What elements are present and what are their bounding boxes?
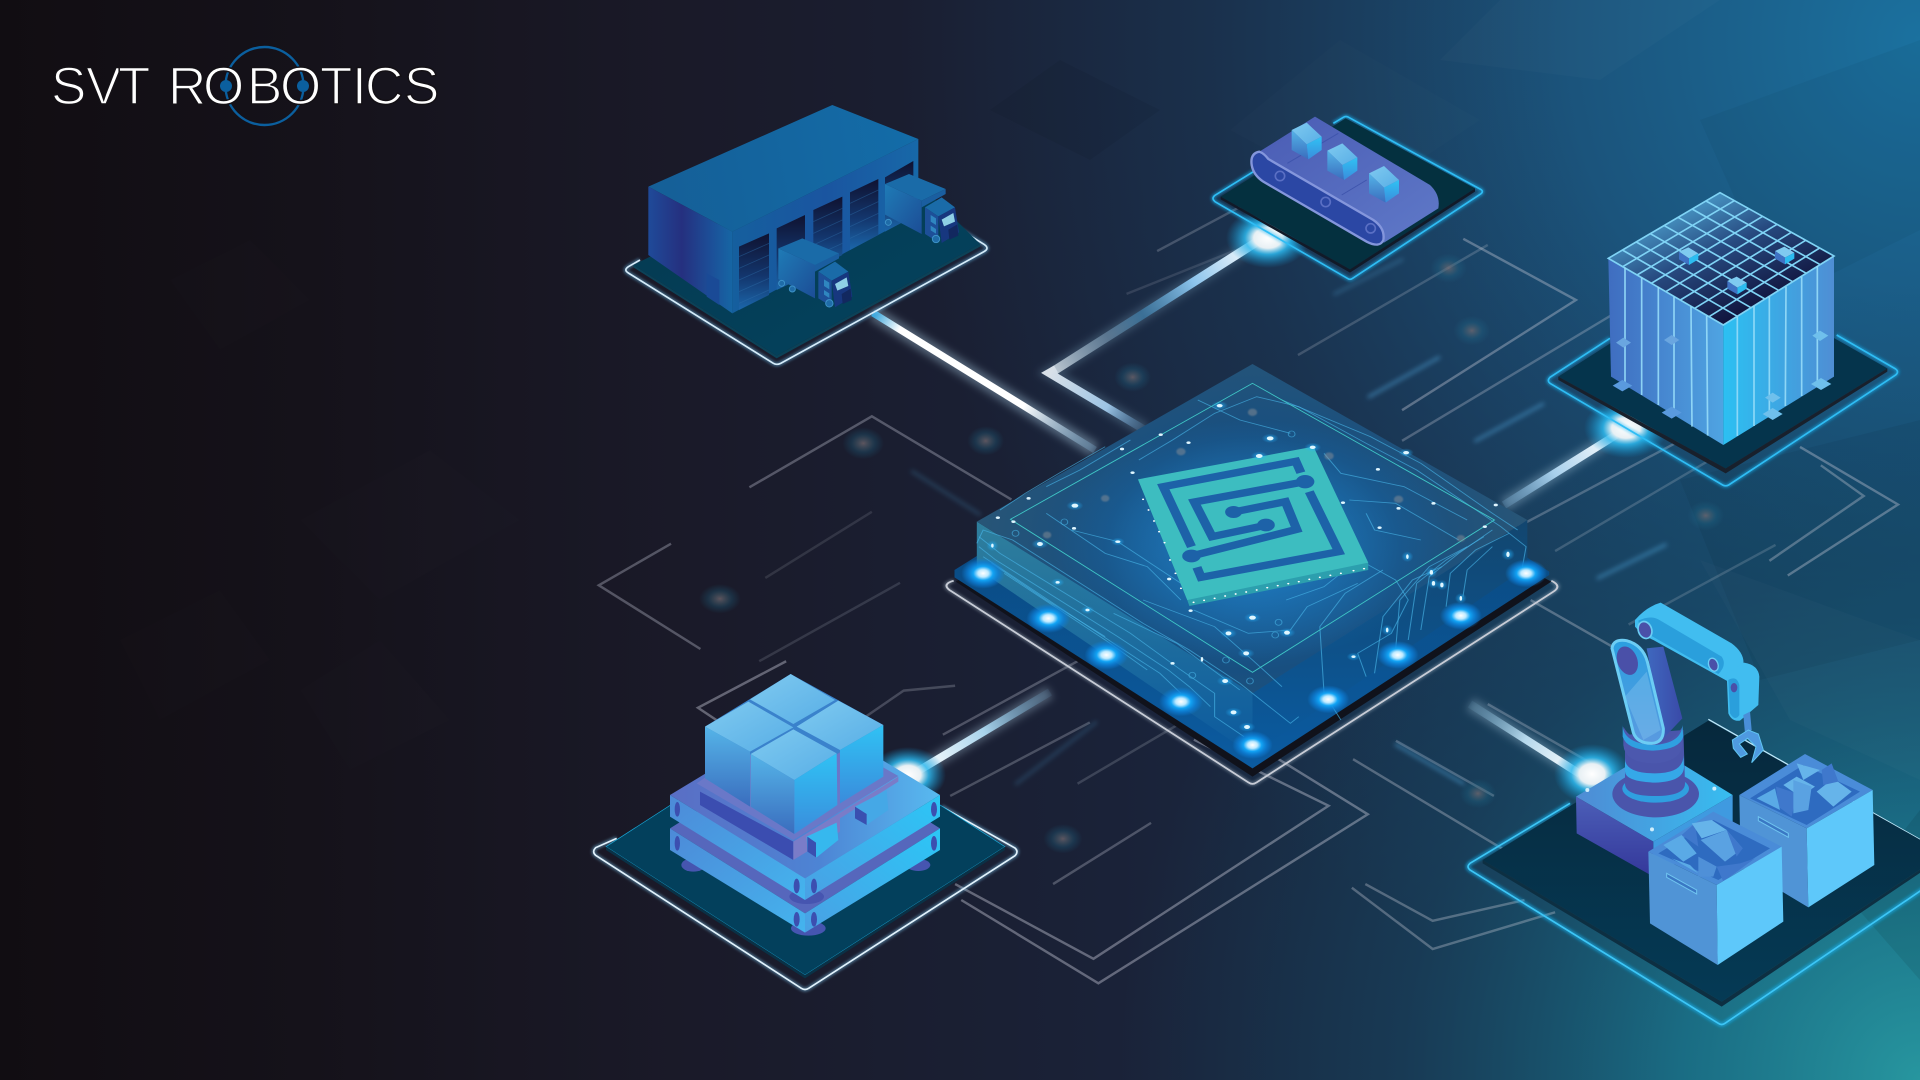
pallet feet: [681, 823, 930, 936]
grey chip spots: [1043, 409, 1465, 542]
connector beam: storage to chip: [1504, 398, 1668, 505]
chip edge lamps: [961, 558, 1547, 759]
robot wrist: [1727, 663, 1759, 733]
front bin contents: [1663, 820, 1755, 882]
box: left: [705, 702, 793, 807]
box: right: [797, 701, 883, 803]
blurred light streaks: [912, 260, 1665, 784]
background circuit lines: [599, 202, 1898, 983]
maze pattern: [1163, 461, 1339, 577]
robot platform slab: [1483, 721, 1920, 1002]
conveyor box 2: [1327, 143, 1357, 180]
panel: conveyor platform: [1213, 116, 1482, 279]
box: front: [751, 729, 837, 834]
box stack backing: [705, 674, 883, 782]
conveyor box 1: [1292, 123, 1322, 159]
warehouse building: [648, 105, 918, 313]
chip outline: [946, 581, 1557, 784]
robot upper arm: [1635, 603, 1744, 682]
logo wordmark: SVT ROBOTICS: [51, 57, 439, 116]
chip glowing dots: [991, 404, 1510, 729]
platform outline: [626, 223, 987, 364]
chip top face: [977, 364, 1527, 693]
truck: front: [778, 238, 852, 307]
robot base: [1576, 748, 1733, 877]
storage platform outline: [1548, 335, 1897, 486]
logo: SVT Robotics: [51, 47, 439, 125]
chip shadow: [956, 423, 1551, 777]
pallet platform slab: [606, 718, 1005, 975]
robot platform outline: [1468, 719, 1920, 1024]
robot gripper: [1732, 730, 1763, 763]
storage robots on grid: [1679, 247, 1794, 294]
chip inner outline: [1010, 383, 1495, 672]
glowing network nodes: [699, 253, 1724, 853]
conveyor platform outline: [1213, 116, 1482, 279]
robot lower arm: [1612, 640, 1682, 743]
panel: robot platform: [1468, 603, 1920, 1024]
teal logo chip: [1138, 447, 1368, 606]
robot arm column: [1612, 725, 1699, 817]
pallet platform outline: [594, 807, 1017, 989]
panel: central chip: [946, 364, 1557, 784]
logo dots: [220, 80, 309, 92]
wooden pallet: [697, 717, 898, 860]
circuit traces: [977, 397, 1526, 737]
storage cube: [1608, 193, 1834, 445]
connector beam: warehouse to chip: [873, 313, 1095, 450]
panel: warehouse platform: [626, 105, 987, 364]
connector beam: conveyor to chip: [1049, 208, 1310, 430]
conveyor rollers: [1275, 171, 1375, 233]
loading dock doors: [739, 161, 913, 310]
lower pallet tier: [670, 743, 940, 933]
bin: rear: [1739, 754, 1874, 907]
chip pins: [1142, 498, 1365, 603]
logo ring: [226, 47, 304, 125]
conveyor platform slab: [1221, 118, 1475, 269]
chip glowing dot halos: [986, 401, 1515, 732]
conveyor belt: [1251, 117, 1439, 245]
chip base plate: [955, 383, 1549, 768]
bin: front: [1648, 812, 1783, 965]
rear bin contents: [1757, 763, 1852, 817]
logo chip halo: [1050, 420, 1455, 660]
connector beam: pallet to chip: [870, 692, 1050, 803]
storage grid lines: [1608, 193, 1834, 325]
storage side brackets: [1613, 331, 1831, 420]
upper pallet tier: [670, 713, 940, 904]
connector beam: robot to chip: [1470, 704, 1630, 804]
truck: rear: [885, 174, 959, 243]
chip right wall: [1252, 520, 1527, 755]
storage platform slab: [1558, 273, 1887, 468]
box: back: [750, 674, 835, 724]
storage column rails: [1625, 266, 1817, 436]
conveyor box 3: [1369, 166, 1399, 203]
panel: pallet platform: [594, 674, 1017, 989]
panel: storage grid platform: [1548, 193, 1897, 486]
platform slab: [633, 143, 980, 356]
chip left wall: [977, 522, 1252, 755]
